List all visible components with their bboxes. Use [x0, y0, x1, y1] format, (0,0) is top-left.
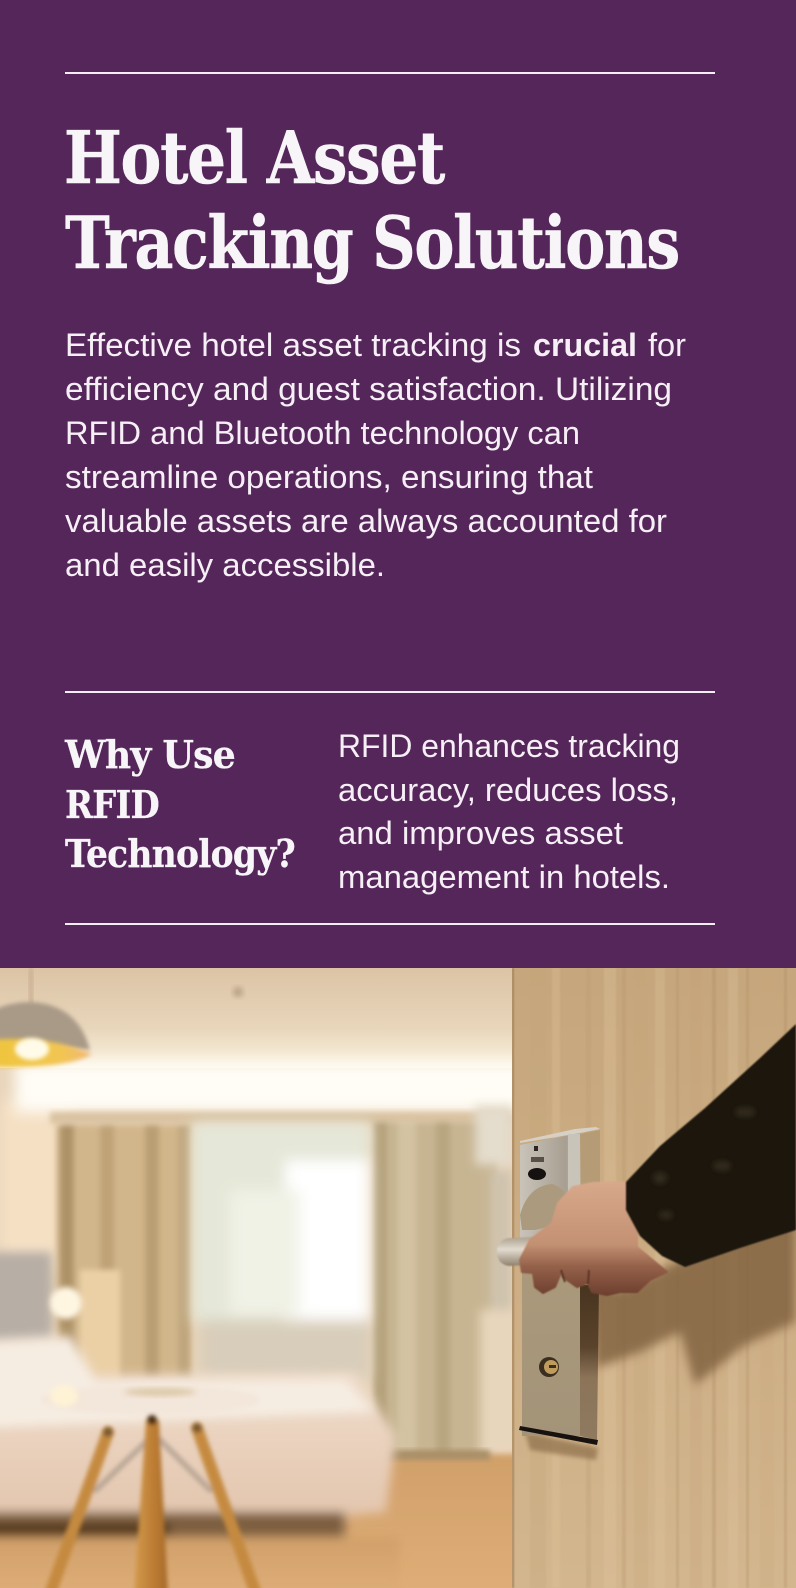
sleeve highlights — [653, 1107, 755, 1219]
arm shadow on door — [590, 1215, 796, 1385]
pendant lamp — [0, 968, 92, 1067]
keycard reader — [528, 1168, 546, 1180]
intro paragraph — [65, 327, 686, 583]
room background, out of focus — [0, 968, 535, 1588]
heading: why use RFID technology: Why Use — [64, 732, 235, 777]
bedside lamp glow — [50, 1287, 82, 1319]
RFID description: accuracy, reduces loss, — [338, 772, 678, 808]
RFID description — [338, 728, 680, 895]
sleeve — [626, 1024, 796, 1267]
lock plate — [519, 1127, 600, 1445]
wood grain — [512, 968, 787, 1588]
panel: why use RFID — [64, 691, 715, 925]
intro paragraph: for — [648, 327, 686, 363]
intro paragraph: streamline operations, ensuring that — [65, 459, 593, 495]
photo: hand opening hotel room door — [0, 968, 796, 1588]
RFID description: RFID enhances tracking — [338, 728, 680, 764]
table — [40, 1385, 260, 1588]
heading: why use RFID technology: RFID — [65, 782, 159, 827]
intro paragraph: RFID and Bluetooth technology can — [65, 415, 580, 451]
intro paragraph: crucial — [533, 327, 637, 363]
intro paragraph: valuable assets are always accounted for — [65, 503, 667, 539]
heading: why use RFID technology: Technology? — [65, 831, 295, 876]
RFID description: and improves asset — [338, 815, 623, 851]
intro paragraph: and easily accessible. — [65, 547, 385, 583]
title: Tracking Solutions — [65, 200, 679, 285]
RFID description: management in hotels. — [338, 859, 670, 895]
key cylinder — [539, 1357, 559, 1377]
heading: why use RFID technology — [64, 732, 295, 876]
intro paragraph: Effective hotel asset tracking is — [65, 327, 521, 363]
wall unit and right wall — [475, 1105, 512, 1460]
bed — [0, 1252, 400, 1588]
title — [64, 115, 679, 285]
ceiling fixture — [233, 987, 243, 997]
title: Hotel Asset — [64, 115, 445, 200]
door — [512, 968, 796, 1588]
curtains — [56, 1122, 497, 1462]
window — [192, 1122, 370, 1380]
plate shadow — [525, 1432, 598, 1460]
panel: purple header background — [0, 0, 796, 968]
hand — [520, 1182, 667, 1295]
panel: introduction — [64, 72, 715, 583]
intro paragraph: efficiency and guest satisfaction. Utilizing — [65, 371, 672, 407]
handle — [497, 1236, 560, 1266]
